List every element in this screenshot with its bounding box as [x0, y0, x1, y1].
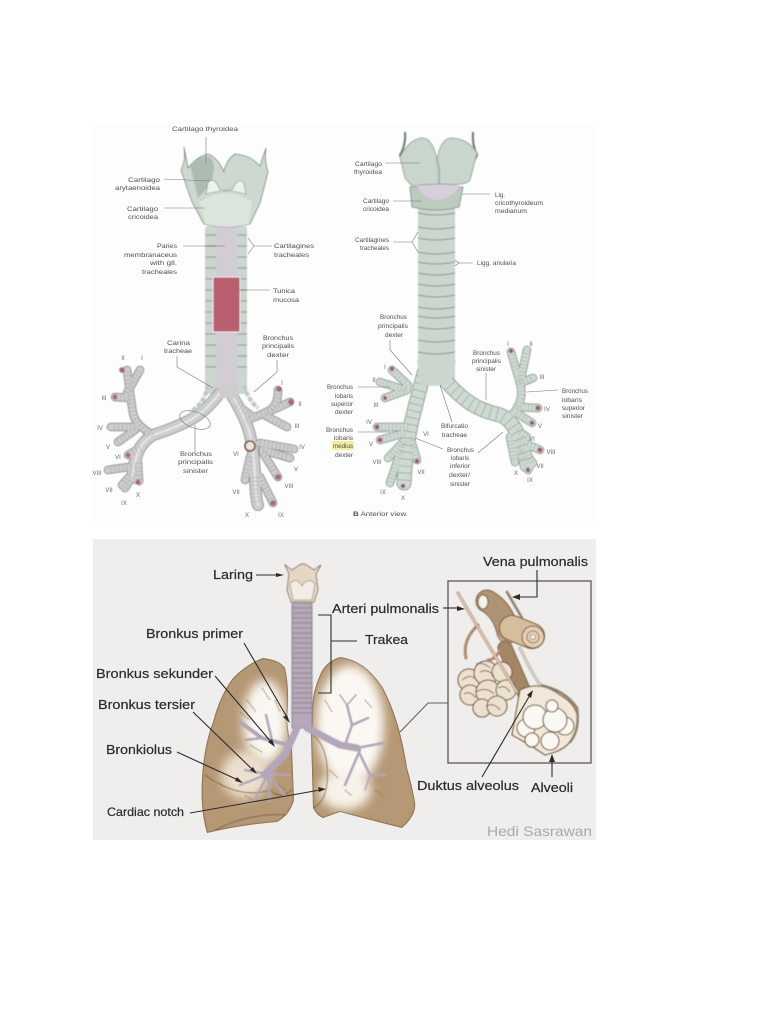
labels: anterior segment numerals: I [507, 342, 509, 348]
labels: posterior segment numerals: VII [105, 488, 113, 494]
label: Cartilago cricoidea (anterior) [363, 198, 422, 213]
label: Cartilago arytaenoidea: Cartilago [128, 177, 161, 184]
label: Paries membranaceus: tracheales [142, 269, 177, 276]
panel: trachea anatomy illustrations [93, 125, 596, 525]
labels: posterior segment numerals: X [245, 513, 249, 519]
caption: B Anterior view: B Anterior view. [353, 511, 408, 518]
label: Cartilago cricoidea: Cartilago [127, 206, 159, 213]
labels: anterior segment numerals: II [529, 342, 533, 348]
labels: posterior segment numerals: IV [299, 445, 305, 451]
arrow: Arteri pulmonalis [443, 606, 465, 611]
labels: posterior segment numerals: X [136, 493, 140, 499]
label: Bronkus primer: Bronkus primer [146, 626, 244, 641]
labels: posterior segment numerals: III [101, 396, 107, 402]
icon: right alveolar cluster [512, 686, 578, 755]
labels: anterior segment numerals: VI [529, 437, 535, 443]
label: Bronchus principalis sinister: principalis [178, 459, 213, 466]
label: Bronchus lobaris superior sinister [527, 388, 588, 420]
label: Bronchus principalis sinister (anterior): principalis [472, 358, 501, 365]
label: Carina tracheae: Carina [167, 340, 191, 347]
labels: anterior segment numerals: VII [417, 470, 425, 476]
label: Bronchus lobaris inferior dexter/sinister: lobaris [451, 455, 469, 462]
labels: anterior segment numerals: IV [366, 420, 372, 426]
arrow: Bronkiolus [177, 752, 243, 783]
label: Cartilagines tracheales: Cartilagines [274, 243, 314, 250]
label: Cartilago arytaenoidea: arytaenoidea [115, 185, 161, 192]
panel: alveoli inset frame [448, 581, 591, 763]
icon: anterior bronchial tree [375, 349, 542, 488]
label: Ligg. anularia: Ligg. anularia [477, 260, 517, 267]
labels: posterior segment numerals: I [141, 356, 143, 362]
labels: anterior segment numerals: V [538, 424, 542, 430]
label: Tunica mucosa [236, 288, 300, 304]
labels: respiratory diagram [96, 554, 589, 819]
arrow: Bronkus tersier [193, 712, 257, 774]
label: Bronkiolus: Bronkiolus [106, 742, 173, 757]
labels: anterior segment numerals: VII [536, 464, 544, 470]
labels: anterior segment numerals: VI [423, 432, 429, 438]
labels: posterior segment numerals: VIII [92, 471, 102, 477]
label: Bronchus lobaris inferior dexter/sinister: sinister [450, 481, 470, 488]
labels: anterior segment numerals: III [539, 375, 545, 381]
arrow: Bronkus sekunder [215, 676, 275, 747]
label: Bronchus lobaris superior sinister: Bronchus [562, 388, 588, 395]
labels: anterior segment numerals: IX [527, 478, 533, 484]
icon: left alveolar cluster [458, 661, 516, 717]
labels: anterior segment numerals: IX [380, 490, 386, 496]
labels: anterior segment numerals: I [384, 365, 386, 371]
label: Cartilagines tracheales: tracheales [274, 252, 309, 259]
labels: posterior segment numerals: V [106, 445, 110, 451]
label: Bronchus principalis sinister [177, 407, 213, 475]
labels: anterior segment numerals: X [401, 496, 405, 502]
arrow: Alveoli [549, 754, 555, 777]
label: Bronchus principalis dexter (anterior) [378, 314, 412, 375]
label: Bifurcatio tracheae: tracheae [442, 432, 467, 439]
label: Bronchus lobaris superior sinister: lobaris [562, 397, 582, 404]
label: Vena pulmonalis: Vena pulmonalis [483, 554, 589, 569]
label: Cartilago cricoidea: cricoidea [128, 214, 159, 221]
label: Bronkus sekunder: Bronkus sekunder [96, 666, 214, 681]
figure: anterior trachea and bronchial tree [375, 132, 542, 488]
label: Bronchus principalis sinister (anterior): Bronchus [473, 350, 500, 357]
label: Bronchus principalis dexter: principalis [262, 343, 294, 350]
label: Paries membranaceus: membranaceus [124, 252, 177, 259]
label: Bronchus principalis sinister: sinister [183, 468, 208, 475]
labels: posterior view [115, 126, 314, 475]
label: Bronchus lobaris medius dexter: Bronchus [326, 427, 353, 434]
label: Cartilago thyroidea (anterior): thyroidea [354, 169, 383, 176]
label: Bronchus principalis dexter [254, 335, 294, 392]
labels: anterior segment numerals: II [372, 378, 376, 384]
label: Duktus alveolus: Duktus alveolus [417, 778, 520, 793]
bracket: Trakea [318, 615, 357, 693]
label: Bronchus principalis sinister (anterior): sinister [476, 366, 496, 373]
label: Bronchus principalis sinister (anterior) [472, 350, 501, 400]
arrow: Duktus alveolus [482, 690, 533, 777]
label: Bronchus lobaris superior sinister: sinister [562, 413, 583, 420]
labels: anterior view [326, 161, 588, 518]
label: Bronchus lobaris inferior dexter/sinister: inferior [450, 463, 470, 470]
label: Trakea: Trakea [365, 632, 409, 647]
icon: lavender trachea and bronchi [240, 603, 385, 803]
labels: posterior segment numerals: VI [115, 455, 121, 461]
labels: posterior segment numerals: VII [232, 490, 240, 496]
label: Cartilago cricoidea (anterior): Cartilago [363, 198, 390, 205]
labels: anterior segment numerals: VIII [372, 460, 382, 466]
label: Bifurcatio tracheae [440, 385, 469, 439]
arrow: Bronkus primer [244, 643, 290, 723]
arrow: Laring [256, 573, 284, 577]
label: Cartilago arytaenoidea [115, 177, 210, 192]
arrow: Vena pulmonalis [512, 570, 537, 600]
label: Cartilagines tracheales (anterior) [355, 232, 418, 252]
label: Cartilagines tracheales [248, 238, 314, 259]
label: Laring: Laring [213, 567, 253, 582]
label: Carina tracheae [164, 340, 213, 388]
labels: anterior segment numerals: X [514, 471, 518, 477]
icon: tunica mucosa exposed section [213, 277, 240, 332]
icon: upper bronchiole [478, 595, 544, 692]
label: Lig. cricothyroideum medianum [462, 192, 543, 215]
labels: anterior segment numerals: VIII [546, 450, 556, 456]
label: Bronchus lobaris medius dexter [326, 427, 390, 459]
labels: posterior segment numerals: VIII [284, 484, 294, 490]
labels: posterior segment numerals: I [281, 381, 283, 387]
label: Bronchus lobaris superior sinister: superior [562, 405, 585, 412]
label: Bronchus principalis dexter (anterior): Bronchus [380, 314, 407, 321]
label: Bifurcatio tracheae: Bifurcatio [441, 423, 469, 430]
leader: lung to inset [400, 703, 448, 732]
label: Ligg. anularia [455, 260, 517, 267]
label: Bronchus lobaris superior dexter: Bronchus [327, 384, 353, 391]
label: Cardiac notch: Cardiac notch [107, 805, 184, 819]
watermark: Hedi Sasrawan: Hedi Sasrawan [487, 823, 592, 839]
icon: pulmonary vessels [458, 592, 578, 742]
label: Bronchus lobaris superior dexter [327, 384, 390, 416]
labels: posterior segment numerals: IX [121, 501, 127, 507]
label: Cartilago thyroidea (anterior): Cartilago [355, 161, 383, 168]
labels: posterior segment numerals: IX [278, 513, 284, 519]
label: Cartilago cricoidea [127, 206, 205, 221]
icon: posterior bronchial tree [108, 367, 294, 506]
label: Cartilagines tracheales (anterior): Cartilagines [355, 237, 389, 244]
label: Paries membranaceus: with gll. [149, 260, 177, 267]
labels: posterior segment numerals: II [121, 356, 125, 362]
label: Bronchus principalis dexter (anterior): dexter [385, 332, 403, 339]
label: Bronchus principalis dexter (anterior): principalis [378, 323, 408, 330]
labels: posterior segment numerals: III [294, 424, 300, 430]
label: Bronchus lobaris medius dexter: dexter [335, 452, 353, 459]
label: Cartilago thyroidea [172, 126, 239, 163]
label: Paries membranaceus: Paries [157, 243, 177, 250]
labels: posterior segment numerals: V [294, 467, 298, 473]
label: Tunica mucosa: mucosa [273, 297, 300, 304]
label: Tunica mucosa: Tunica [273, 288, 296, 295]
icon: posterior trachea cartilage rings [205, 226, 247, 396]
label: Lig. cricothyroideum medianum: medianum [495, 208, 527, 215]
label: Cartilagines tracheales (anterior): tracheales [360, 245, 389, 252]
label: Carina tracheae: tracheae [164, 348, 193, 355]
label: Bronchus lobaris inferior dexter/sinister: Bronchus [447, 447, 474, 454]
label: Arteri pulmonalis: Arteri pulmonalis [332, 601, 440, 616]
label: Alveoli: Alveoli [531, 780, 573, 795]
label: Bronchus principalis dexter: dexter [267, 352, 289, 359]
label: Bronkus tersier: Bronkus tersier [98, 697, 196, 712]
label: Bronchus lobaris medius dexter: lobaris [334, 435, 353, 442]
labels: posterior segment numerals: II [298, 402, 302, 408]
arrow: Cardiac notch [190, 787, 326, 813]
label: Bronchus principalis sinister: Bronchus [180, 451, 212, 458]
label: Cartilago cricoidea (anterior): cricoidea [363, 206, 390, 213]
icon: posterior larynx cartilage [181, 147, 268, 227]
labels: anterior segment numerals [366, 342, 556, 502]
label: Bronchus lobaris inferior dexter/sinister: dexter/ [449, 472, 470, 479]
labels: anterior segment numerals: V [369, 442, 373, 448]
labels: anterior segment numerals: IV [544, 407, 550, 413]
icon: anterior larynx [400, 132, 477, 210]
arrows and leader lines: respiratory diagram [177, 570, 555, 813]
label: Bronchus lobaris medius dexter: medius [333, 443, 353, 450]
icon: anterior trachea with rings [418, 205, 455, 385]
label: Lig. cricothyroideum medianum: Lig. [495, 192, 505, 199]
figure: posterior trachea and bronchial tree [108, 147, 294, 506]
labels: posterior segment numerals: IV [97, 426, 103, 432]
panel: respiratory system diagram [93, 539, 596, 840]
label: Cartilago thyroidea (anterior) [354, 161, 420, 176]
icon: right-side lung [311, 657, 416, 828]
label: Cartilago thyroidea: Cartilago thyroidea [172, 126, 239, 133]
labels: posterior segment numerals: VI [233, 452, 239, 458]
label: Bronchus lobaris superior dexter: superior [331, 401, 353, 408]
labels: posterior segment numerals [92, 356, 305, 519]
label: Lig. cricothyroideum medianum: cricothyroideum [495, 200, 543, 207]
label: Paries membranaceus [124, 243, 225, 276]
label: Bronchus lobaris superior dexter: lobaris [335, 393, 353, 400]
label: Bronchus lobaris superior dexter: dexter [335, 409, 353, 416]
icon: left-side lung [202, 658, 294, 833]
icon: alveoli inset illustration [458, 592, 578, 755]
labels: anterior segment numerals: III [373, 403, 379, 409]
label: Bronchus lobaris inferior dexter/sinister [415, 432, 503, 488]
icon: larynx [285, 564, 321, 602]
label: Bronchus principalis dexter: Bronchus [263, 335, 293, 342]
